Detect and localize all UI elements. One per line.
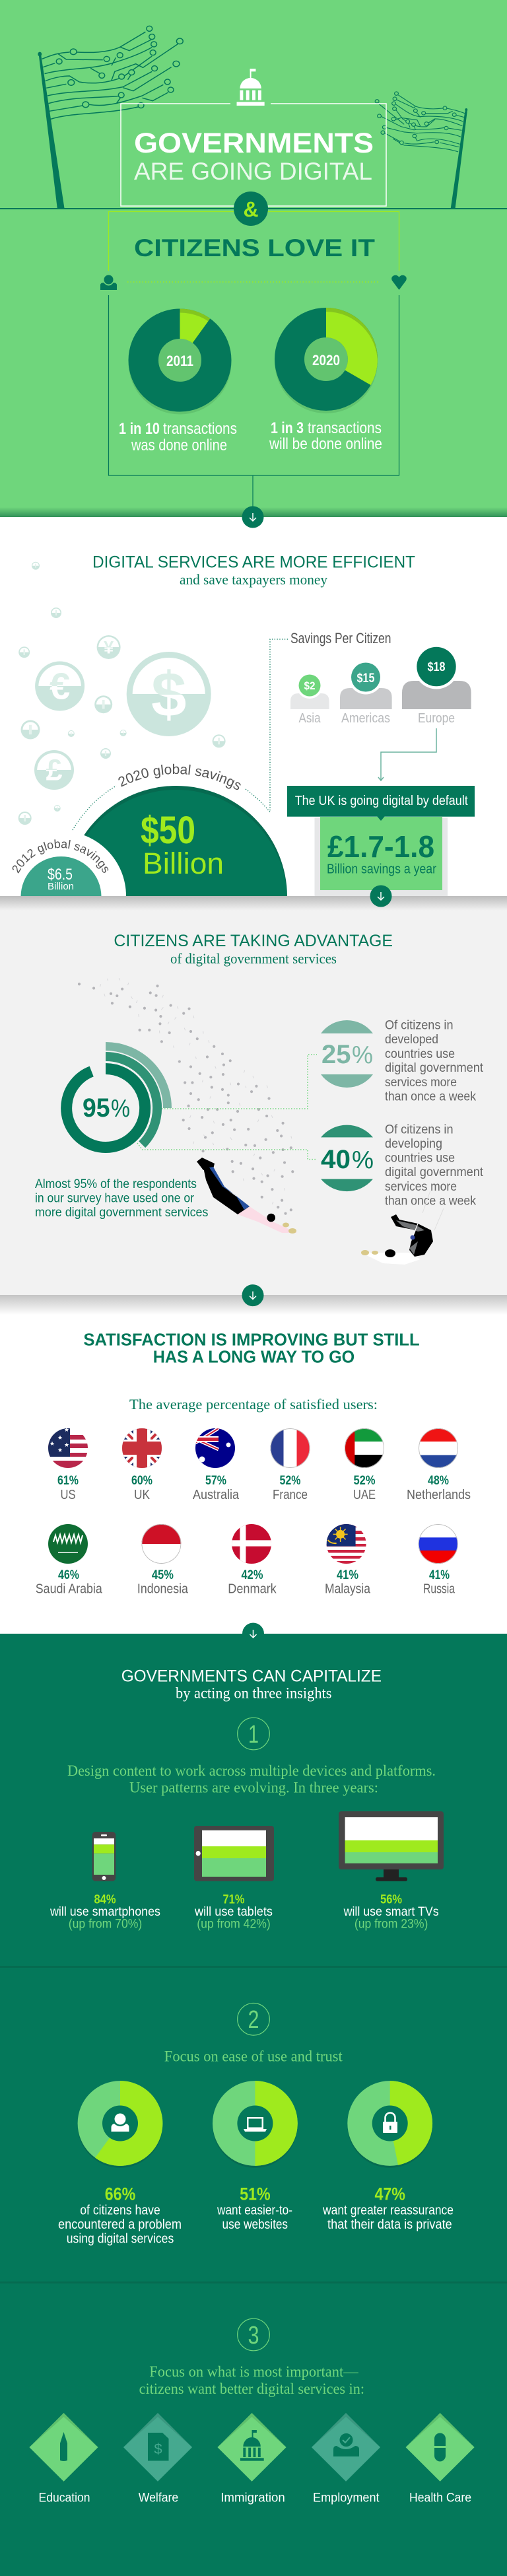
stat: tablets: will use tablets [194, 1904, 273, 1919]
heading: governments can capitalize: GOVERNMENTS CAN CAPITALIZE [121, 1667, 382, 1686]
coin: yen: ¥ [104, 637, 114, 657]
small coins [18, 562, 226, 825]
stat: 66%: encountered a problem [58, 2217, 182, 2232]
chart: 2012 global savings semicircle: Billion [48, 881, 74, 892]
icon: lock [383, 2113, 397, 2133]
diamond: education [29, 2413, 98, 2505]
panel: UK savings [287, 786, 475, 896]
floating currency coins [18, 562, 226, 825]
flag: UAE 52%: 52% [354, 1474, 376, 1488]
stat: 47%: want greater reassurance [322, 2203, 454, 2217]
icon: right circuit flag [375, 92, 467, 208]
panel: digital services [12, 553, 475, 896]
caption: 2020: transactions [308, 419, 382, 437]
flag: Netherlands 48%: Netherlands [407, 1488, 471, 1502]
text: developing countries: services more [385, 1179, 457, 1194]
chart: 2020 global savings semicircle [21, 786, 287, 896]
flag: Russia 41% [419, 1524, 458, 1597]
icon: person [111, 2113, 129, 2132]
flag: Indonesia 45% [137, 1524, 189, 1597]
figure: Asia $2: $2 [304, 679, 316, 692]
stat: 47%: 47% [374, 2184, 405, 2204]
stat: 66%: using digital services [67, 2232, 174, 2246]
insight number 3 [238, 2318, 269, 2351]
text: almost 95%: more digital government services [35, 1205, 209, 1220]
flag: Russia 41%: Russia [423, 1582, 456, 1597]
diamond: welfare: Welfare [139, 2491, 178, 2505]
donut chart: 2011 [128, 309, 231, 416]
lime box outline [108, 211, 399, 271]
heading: satisfaction [83, 1329, 420, 1366]
stat: smart TVs: 56% [380, 1893, 402, 1907]
text: insight 2: Focus on ease of use and trust [164, 2048, 343, 2065]
stat: smartphones: 84% [94, 1893, 116, 1907]
text: almost 95%: in our survey have used one or [35, 1191, 194, 1206]
flag: Indonesia 45%: Indonesia [137, 1582, 189, 1597]
text: insight 3 [139, 2363, 364, 2397]
flag: UAE 52%: UAE [353, 1488, 376, 1502]
text: developed countries: digital government [385, 1061, 484, 1075]
diamond: health care: Health Care [409, 2491, 471, 2505]
subheading: taxpayers: and save taxpayers money [180, 571, 327, 588]
donut chart: 51% laptop [213, 2081, 298, 2168]
title box outline [121, 104, 386, 206]
icon: pill [434, 2433, 446, 2462]
stat: 66% [58, 2184, 182, 2246]
illustration: diving figure 2 [361, 1191, 444, 1265]
flag: Saudi Arabia 46%: 46% [58, 1568, 79, 1582]
donut chart: 66% person [78, 2081, 162, 2168]
flag: UAE 52% [345, 1428, 384, 1502]
diamond: employment [312, 2413, 380, 2505]
arrow badge: hero to digital services [242, 506, 264, 528]
stat: 40% [321, 1125, 374, 1191]
stat: 47% [322, 2184, 454, 2232]
caption: 2011 [119, 420, 237, 454]
stat: 25%: % [352, 1041, 373, 1069]
flag: Malaysia 41% [325, 1524, 371, 1597]
figure: Asia $2 [290, 672, 329, 726]
subheading: average percentage: The average percentage of satisfied users: [129, 1396, 378, 1412]
text: developed countries: services more [385, 1075, 457, 1090]
flag: Malaysia 41%: Malaysia [325, 1582, 371, 1597]
flag: US 61%: 61% [57, 1474, 79, 1488]
arrow badge [242, 1284, 264, 1306]
flag: Australia 57%: Australia [193, 1488, 240, 1502]
flag: Australia 57% [193, 1428, 240, 1502]
subheading: digital government services: of digital government services [170, 950, 337, 967]
flag: Indonesia 45%: 45% [152, 1568, 174, 1582]
text: developing countries: countries use [385, 1151, 455, 1166]
stat: 25%: 25 [321, 1040, 351, 1069]
figure: Europe $18 [402, 644, 471, 726]
subheading: three insights: by acting on three insights [176, 1685, 332, 1702]
stat: 47%: that their data is private [327, 2217, 452, 2232]
UK banner [287, 786, 475, 821]
caption: 2011: was done online [131, 436, 227, 454]
stat: 66%: 66% [105, 2184, 135, 2204]
icon: pencil [60, 2432, 67, 2461]
flag: UK 60% [122, 1428, 162, 1502]
panel: UK savings: Billion savings a year [327, 862, 436, 877]
flag: UK 60%: UK [134, 1488, 151, 1502]
text: insight 1 [67, 1762, 436, 1795]
diamond: employment: Employment [313, 2491, 380, 2505]
stat: smart TVs [343, 1893, 439, 1931]
chart: 2020 global savings semicircle: $50 [141, 809, 195, 852]
insight number 1: 1 [248, 1721, 259, 1749]
heading: digital services: DIGITAL SERVICES ARE MORE EFFICIENT [92, 553, 415, 572]
stat: tablets [194, 1893, 273, 1931]
text: developing countries [385, 1123, 484, 1208]
text: developed countries: developed [385, 1032, 438, 1047]
flag: US 61% [48, 1428, 88, 1502]
icon: smartphone 84% [92, 1832, 116, 1881]
icon: heart [391, 275, 407, 290]
donut chart: 2020 [275, 308, 378, 415]
coin: euro: € [50, 666, 70, 707]
chart: 2012 global savings semicircle [21, 856, 102, 896]
icon: person with check [333, 2433, 359, 2456]
icon: capitol building [237, 69, 265, 106]
stat: smart TVs: will use smart TVs [343, 1904, 439, 1919]
coin: dollar [127, 652, 211, 736]
stat: tablets: (up from 42%) [197, 1916, 271, 1931]
text: almost 95%: Almost 95% of the respondents [35, 1177, 197, 1191]
stat: 51%: use websites [222, 2217, 288, 2232]
panel: hero [0, 0, 507, 517]
subtitle: are going digital: ARE GOING DIGITAL [134, 158, 372, 185]
donut chart: 2011: 2011 [166, 353, 193, 369]
flag: Saudi Arabia 46% [36, 1524, 103, 1597]
arrow badge [370, 885, 392, 907]
diamond: health care [406, 2413, 475, 2505]
flag: Denmark 42%: Denmark [228, 1582, 277, 1597]
heading: satisfaction: HAS A LONG WAY TO GO [153, 1346, 355, 1366]
insight number 2: 2 [248, 2006, 259, 2034]
text: developing countries: than once a week [385, 1193, 476, 1208]
caption: 2020 [269, 419, 382, 453]
text: insight 3: citizens want better digital services in: [139, 2381, 364, 2397]
figure: Europe $18: $18 [428, 660, 445, 674]
stat: 40%: % [352, 1146, 374, 1174]
donut chart: 2020: 2020 [312, 352, 340, 368]
text: developed countries [385, 1018, 484, 1103]
flag: Netherlands 48%: 48% [428, 1474, 449, 1488]
coin: pound [34, 750, 74, 790]
ampersand badge: & [243, 197, 259, 221]
stat: 51% [217, 2184, 292, 2232]
flag: France 52%: 52% [280, 1474, 301, 1488]
stat: smartphones: (up from 70%) [69, 1916, 142, 1931]
text: developed countries: than once a week [385, 1089, 476, 1103]
donut chart: 47% lock [347, 2081, 432, 2168]
insight number 3: 3 [248, 2322, 259, 2350]
arrow: Europe to UK [378, 728, 436, 781]
heading: savings per citizen: Savings Per Citizen [290, 630, 391, 646]
flag: Netherlands 48% [407, 1428, 471, 1502]
ring chart: 95% [67, 1046, 168, 1147]
icon: left circuit flag [38, 26, 183, 208]
flag: Denmark 42%: 42% [242, 1568, 263, 1582]
stat: 40%: 40 [321, 1145, 351, 1174]
flag: Russia 41%: 41% [429, 1568, 450, 1582]
UK banner: The UK is going digital by default [295, 794, 468, 808]
stat: smart TVs: (up from 23%) [355, 1916, 428, 1931]
text: developing countries: Of citizens in [385, 1123, 453, 1137]
ring chart: 95%: % [111, 1095, 130, 1123]
panel: citizens taking advantage [0, 885, 507, 1295]
icon: smart TV 56% [339, 1811, 444, 1881]
stat: smartphones: will use smartphones [50, 1904, 160, 1919]
curved label: 2020 global savings: 2020 global savings [118, 763, 241, 790]
arrow badge [242, 1623, 264, 1644]
ampersand badge [234, 191, 268, 226]
diamond: welfare [123, 2413, 192, 2505]
panel: UK savings: £1.7-1.8 [327, 829, 434, 864]
text: developing countries: digital government [385, 1165, 484, 1179]
caption: 2020: will be done online [269, 435, 382, 453]
stat: smartphones [50, 1893, 160, 1931]
text: almost 95% [35, 1177, 209, 1220]
scattered particle trail [79, 978, 292, 1214]
text: insight 1: Design content to work across multiple devices and platforms. [67, 1762, 436, 1779]
flag: France 52%: France [273, 1488, 308, 1502]
text: developed countries: Of citizens in [385, 1018, 453, 1033]
icon: citizen [100, 275, 117, 290]
chart: 2012 global savings semicircle: $6.5 [48, 866, 73, 884]
insight number 2 [238, 2003, 269, 2035]
chart: 2020 global savings semicircle: Billion [143, 847, 224, 880]
coin: pound: £ [46, 753, 63, 787]
panel: governments can capitalize [0, 1623, 507, 2576]
figure: Americas $15 [340, 660, 392, 726]
stat: 51%: want easier-to- [217, 2203, 292, 2217]
heading: satisfaction: SATISFACTION IS IMPROVING BUT STILL [83, 1329, 420, 1349]
stat: 25% [321, 1020, 373, 1088]
diamond: education: Education [38, 2491, 90, 2505]
icon: laptop [244, 2117, 267, 2132]
caption: 2011: 1 in 10 [119, 420, 160, 438]
flag: UK 60%: 60% [131, 1474, 152, 1488]
illustration: diving figure 1 [197, 1158, 297, 1234]
flag: Saudi Arabia 46%: Saudi Arabia [36, 1582, 103, 1597]
curved label: 2012 global savings: 2012 global savings [12, 839, 108, 874]
flag: Malaysia 41%: 41% [337, 1568, 358, 1582]
coin: euro [35, 662, 84, 711]
title: governments: GOVERNMENTS [134, 127, 374, 159]
figure: Europe $18: Europe [418, 711, 455, 726]
text: developed countries: countries use [385, 1047, 455, 1061]
text: insight 1: User patterns are evolving. In three years: [129, 1779, 378, 1795]
flag: France 52% [271, 1428, 310, 1502]
icon: document with dollar: $ [154, 2441, 162, 2457]
flag: Denmark 42% [228, 1524, 277, 1597]
text: developing countries: developing [385, 1136, 442, 1151]
coin: yen [97, 635, 121, 659]
panel: satisfaction [0, 1284, 507, 1595]
figure: Asia $2: Asia [298, 711, 321, 726]
insight number 1 [238, 1718, 269, 1750]
stat: 51%: 51% [240, 2184, 271, 2204]
coin: dollar: $ [151, 659, 186, 730]
caption: 2011: transactions [163, 420, 237, 438]
icon: tablet 71% [194, 1826, 274, 1881]
diamond: immigration [218, 2413, 287, 2505]
ring chart: 95%: 95 [83, 1094, 110, 1123]
text: insight 3: Focus on what is most important— [149, 2363, 359, 2380]
heading: citizens love it: CITIZENS LOVE IT [134, 234, 375, 261]
diamond: immigration: Immigration [220, 2491, 285, 2505]
heading: citizens taking advantage: CITIZENS ARE TAKING ADVANTAGE [114, 932, 393, 950]
stat: tablets: 71% [223, 1893, 244, 1907]
flag: US 61%: US [61, 1488, 75, 1502]
caption: 2020: 1 in 3 [271, 419, 304, 437]
figure: Americas $15: $15 [356, 672, 375, 685]
flag: Australia 57%: 57% [205, 1474, 226, 1488]
icon: capitol [240, 2430, 264, 2461]
figure: Americas $15: Americas [341, 711, 390, 726]
stat: 66%: of citizens have [80, 2203, 160, 2217]
